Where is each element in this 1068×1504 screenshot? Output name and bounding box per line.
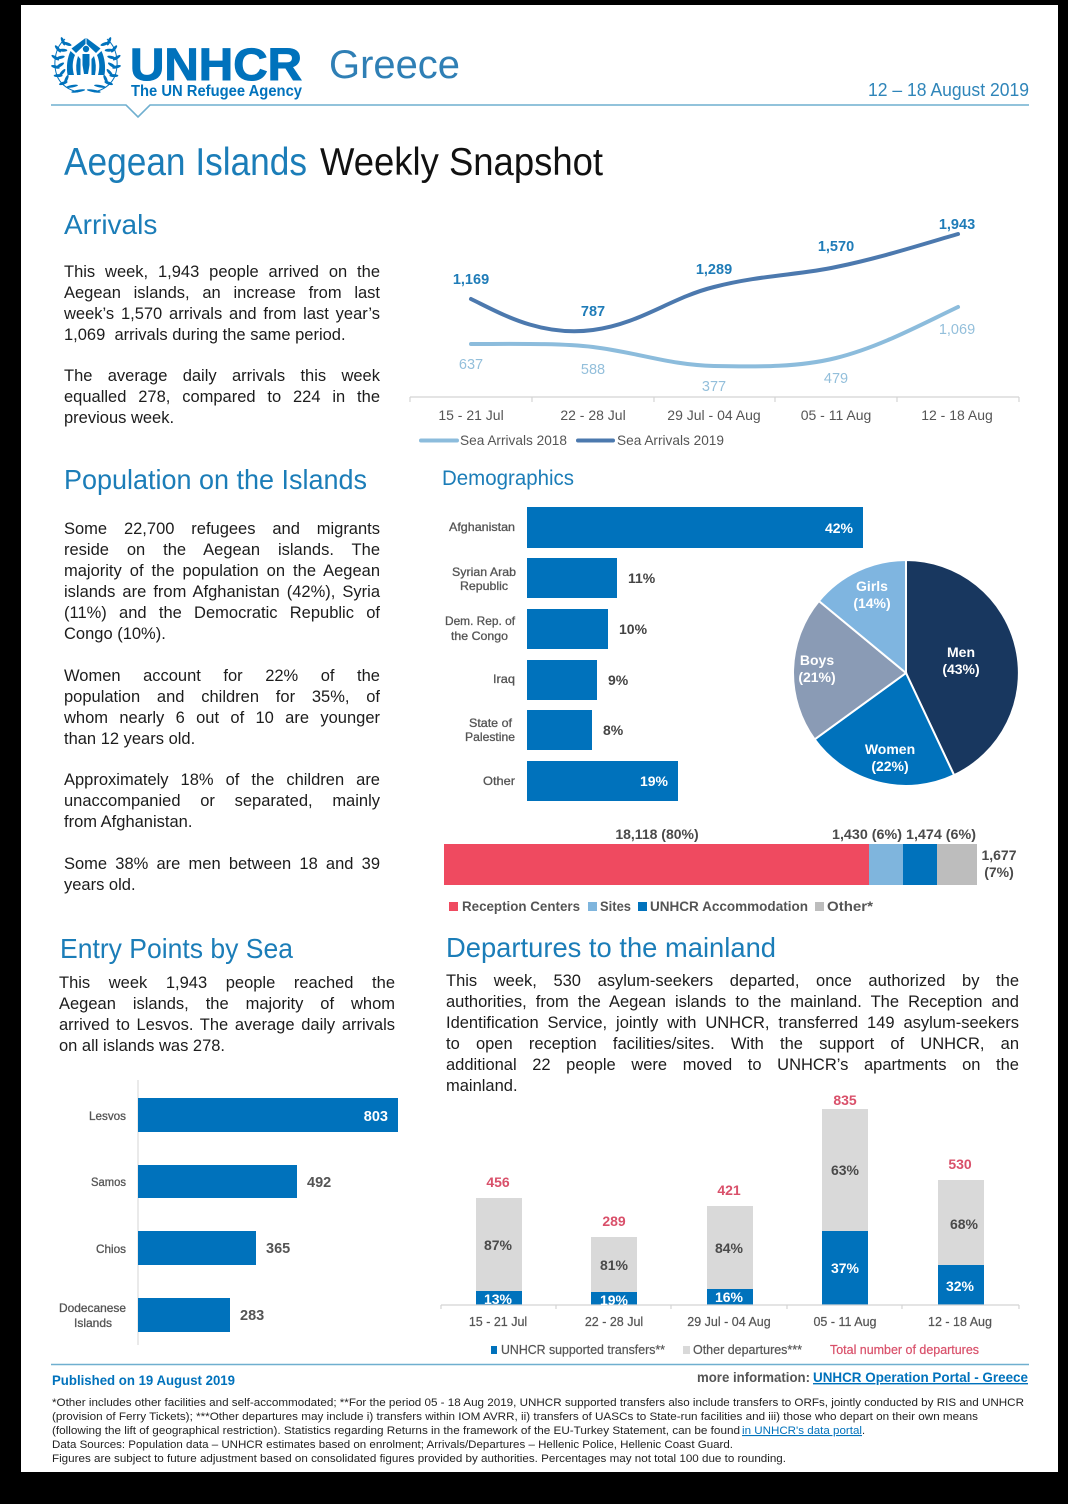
footnotes: *Other includes other facilities and self-accommodated; **For the period 05 - 18 Aug 2019, UNHCR supported transfers also include transfers to ORFs, jointly conducted by RIS and UNHCR xyxy=(52,1397,1024,1409)
stacked bar: accommodation: 1,430 (6%) xyxy=(832,826,902,842)
bar chart: entry points: Chios xyxy=(96,1242,126,1256)
stacked column chart: departures: 81% xyxy=(600,1257,629,1273)
bar chart: nationalities: 42% xyxy=(825,520,854,536)
text: departures summary: This week, 530 asylum-seekers departed, once authorized by the xyxy=(446,972,1019,990)
bar chart: entry points: Dodecanese xyxy=(59,1301,126,1315)
title xyxy=(64,141,603,184)
footnotes xyxy=(52,1397,1024,1465)
pie chart: age and gender: Women xyxy=(865,741,915,757)
legend: accommodation xyxy=(449,899,874,914)
header: UNHCR logo: The UN Refugee Agency xyxy=(131,83,302,100)
text: population summary: majority of the population on the Aegean xyxy=(64,562,380,580)
footnotes: (provision of Ferry Tickets); ***Other departures may include i) transfers within IOM AVRR, ii) transfers of UASCs to State-run facilities and iii) those who depart on their own means xyxy=(52,1411,979,1423)
text: population summary: unaccompanied or separated, mainly xyxy=(64,792,380,810)
pie chart: age and gender: (14%) xyxy=(853,595,891,611)
line chart: sea arrivals: 1,943 xyxy=(939,217,975,233)
bar chart: nationalities: Palestine xyxy=(465,730,515,744)
bar chart: nationalities: Iraq xyxy=(493,672,515,686)
stacked column chart: departures xyxy=(441,1092,1019,1357)
bar chart: entry points: 492 xyxy=(307,1175,331,1191)
text: arrivals summary: This week, 1,943 people arrived on the xyxy=(64,263,380,281)
stacked column chart: departures: 16% xyxy=(715,1289,744,1305)
line chart: sea arrivals: 1,289 xyxy=(696,262,732,278)
text: population summary: than 12 years old. xyxy=(64,730,195,748)
text: departures summary: additional 22 people were moved to UNHCR’s apartments on the xyxy=(446,1056,1019,1074)
line chart: sea arrivals: 12 - 18 Aug xyxy=(921,407,993,423)
more information link xyxy=(697,1369,1028,1385)
stacked column chart: departures: 530 xyxy=(948,1156,972,1172)
bar chart: nationalities: Republic xyxy=(460,579,508,593)
text: departures summary: authorities, from the Aegean islands to the mainland. The Reception and xyxy=(446,993,1019,1011)
pie chart: age and gender: Girls xyxy=(856,578,888,594)
line chart: sea arrivals: 1,570 xyxy=(818,239,854,255)
text: population summary: Approximately 18% of the children are xyxy=(64,771,380,789)
stacked column chart: departures: 15 - 21 Jul xyxy=(469,1315,527,1329)
footnotes: . xyxy=(862,1425,865,1437)
line chart: sea arrivals: 479 xyxy=(824,371,848,387)
pie chart: age and gender: (22%) xyxy=(871,758,909,774)
stacked column chart: departures: 22 - 28 Jul xyxy=(585,1315,643,1329)
header: UNHCR logo xyxy=(51,37,302,100)
text: population summary: Some 22,700 refugees and migrants xyxy=(64,520,380,538)
bar chart: nationalities: State of xyxy=(469,716,513,730)
text: entry points summary: This week 1,943 people reached the xyxy=(59,974,395,992)
text: population summary: (11%) and the Democratic Republic of xyxy=(64,604,380,622)
stacked column chart: departures: 456 xyxy=(486,1174,510,1190)
pie chart: age and gender: (21%) xyxy=(798,669,836,685)
text: entry points summary: on all islands was 278. xyxy=(59,1037,225,1055)
header: date: 12 – 18 August 2019 xyxy=(868,80,1029,100)
stacked column chart: departures: 289 xyxy=(602,1213,626,1229)
stacked bar: accommodation: 1,474 (6%) xyxy=(906,826,976,842)
stacked bar: accommodation: 1,677 xyxy=(981,847,1017,863)
stacked column chart: departures: 12 - 18 Aug xyxy=(928,1315,992,1329)
bar chart: entry points: 803 xyxy=(364,1109,388,1125)
text: population summary: whom nearly 6 out of 10 are younger xyxy=(64,709,380,727)
bar chart: nationalities: 11% xyxy=(628,570,656,586)
footnotes: in UNHCR's data portal xyxy=(742,1425,862,1437)
bar chart: entry points: 283 xyxy=(240,1308,264,1324)
text: arrivals summary: Aegean islands, an increase from last xyxy=(64,284,380,302)
stacked column chart: departures: 05 - 11 Aug xyxy=(813,1315,877,1329)
legend: accommodation: Reception Centers xyxy=(462,899,580,914)
bar chart: nationalities: 19% xyxy=(640,773,669,789)
stacked column chart: departures: 84% xyxy=(715,1240,744,1256)
bar chart: entry points: Samos xyxy=(91,1175,126,1189)
text: arrivals summary: week’s 1,570 arrivals and from last year’s xyxy=(64,305,380,323)
legend: accommodation: Sites xyxy=(600,899,631,914)
bar chart: entry points: Islands xyxy=(74,1316,112,1330)
stacked column chart: departures: 32% xyxy=(946,1278,975,1294)
more information link: UNHCR Operation Portal - Greece xyxy=(813,1369,1028,1385)
legend: departures: UNHCR supported transfers** xyxy=(501,1343,665,1357)
stacked bar: accommodation: 18,118 (80%) xyxy=(615,826,699,842)
line chart: sea arrivals: Sea Arrivals 2019 xyxy=(617,432,724,448)
footnotes: Figures are subject to future adjustment based on consolidated figures provided by authorities. Percentages may not total 100 due to rounding. xyxy=(52,1453,786,1465)
heading: arrivals: Arrivals xyxy=(64,209,157,240)
title: Weekly Snapshot xyxy=(320,141,603,184)
heading: departures: Departures to the mainland xyxy=(446,932,776,963)
bar chart: nationalities: Other xyxy=(483,774,515,788)
bar chart: nationalities: 9% xyxy=(608,672,629,688)
stacked column chart: departures: 13% xyxy=(484,1291,513,1307)
text: arrivals summary xyxy=(64,263,380,427)
line chart: sea arrivals: 787 xyxy=(581,304,605,320)
legend: departures: Other departures*** xyxy=(693,1343,802,1357)
pie chart: age and gender: Boys xyxy=(800,652,834,668)
icon: UNHCR emblem xyxy=(51,37,121,93)
text: population summary: years old. xyxy=(64,876,136,894)
text: population summary: from Afghanistan. xyxy=(64,813,192,831)
line chart: sea arrivals: 05 - 11 Aug xyxy=(801,407,871,423)
text: population summary: Congo (10%). xyxy=(64,625,166,643)
bar chart: nationalities xyxy=(445,507,863,801)
line chart: sea arrivals: Sea Arrivals 2018 xyxy=(460,432,567,448)
line chart: sea arrivals: 15 - 21 Jul xyxy=(438,407,504,423)
stacked column chart: departures: 68% xyxy=(950,1216,979,1232)
header: UNHCR logo: UNHCR xyxy=(130,39,302,90)
text: departures summary: mainland. xyxy=(446,1077,518,1095)
legend: departures: Total number of departures xyxy=(830,1343,979,1357)
footnotes: Data Sources: Population data – UNHCR estimates based on enrolment; Arrivals/Departures – Hellenic Police, Hellenic Coast Guard. xyxy=(52,1439,733,1451)
text: departures summary xyxy=(446,972,1019,1095)
bar chart: entry points: Lesvos xyxy=(89,1109,126,1123)
legend: accommodation: Other* xyxy=(827,899,874,914)
line chart: sea arrivals: 637 xyxy=(459,357,483,373)
heading: demographics: Demographics xyxy=(442,466,574,490)
header: country name: Greece xyxy=(329,43,460,87)
title: Aegean Islands xyxy=(64,141,307,184)
text: population summary: Women account for 22% of the xyxy=(64,667,380,685)
line chart: sea arrivals: 1,169 xyxy=(453,272,489,288)
bar chart: nationalities: Dem. Rep. of xyxy=(445,614,516,628)
text: population summary: population and children for 35%, of xyxy=(64,688,380,706)
text: arrivals summary: The average daily arrivals this week xyxy=(64,367,380,385)
text: population summary xyxy=(64,520,380,894)
text: population summary: Some 38% are men between 18 and 39 xyxy=(64,855,380,873)
text: arrivals summary: previous week. xyxy=(64,409,174,427)
stacked column chart: departures: 37% xyxy=(831,1260,860,1276)
text: population summary: islands are from Afghanistan (42%), Syria xyxy=(64,583,380,601)
line chart: sea arrivals: 22 - 28 Jul xyxy=(560,407,626,423)
publication date: Published on 19 August 2019 xyxy=(52,1372,235,1388)
stacked column chart: departures: 19% xyxy=(600,1292,629,1308)
footer rule xyxy=(51,1364,1029,1366)
legend: departures xyxy=(491,1343,979,1357)
stacked column chart: departures: 421 xyxy=(717,1182,741,1198)
bar chart: nationalities: 10% xyxy=(619,621,648,637)
more information link: more information: xyxy=(697,1369,810,1385)
text: population summary: reside on the Aegean islands. The xyxy=(64,541,380,559)
bar chart: entry points: 365 xyxy=(266,1241,290,1257)
line chart: sea arrivals: 588 xyxy=(581,362,605,378)
bar chart: entry points xyxy=(59,1080,398,1345)
text: entry points summary: arrived to Lesvos. The average daily arrivals xyxy=(59,1016,395,1034)
pie chart: age and gender xyxy=(793,560,1019,786)
text: entry points summary: Aegean islands, the majority of whom xyxy=(59,995,395,1013)
heading: entry points: Entry Points by Sea xyxy=(60,933,294,964)
text: departures summary: Identification Service, jointly with UNHCR, transferred 149 asylum-seekers xyxy=(446,1014,1019,1032)
bar chart: nationalities: 8% xyxy=(603,722,624,738)
text: entry points summary xyxy=(59,974,395,1055)
pie chart: age and gender: Men xyxy=(947,644,975,660)
stacked column chart: departures: 835 xyxy=(833,1092,857,1108)
line chart: sea arrivals: 377 xyxy=(702,379,726,395)
stacked column chart: departures: 63% xyxy=(831,1162,860,1178)
text: arrivals summary: equalled 278, compared to 224 in the xyxy=(64,388,380,406)
text: arrivals summary: 1,069 arrivals during the same period. xyxy=(64,326,346,344)
bar chart: nationalities: Syrian Arab xyxy=(452,565,516,579)
text: departures summary: to open reception facilities/sites. With the support of UNHCR, an xyxy=(446,1035,1019,1053)
line chart: sea arrivals: 29 Jul - 04 Aug xyxy=(667,407,761,423)
heading: population: Population on the Islands xyxy=(64,464,367,495)
footnotes: (following the lift of geographical restriction). Statistics regarding Returns in the framework of the EU-Turkey Statement, can be found xyxy=(52,1425,740,1437)
stacked column chart: departures: 29 Jul - 04 Aug xyxy=(687,1315,771,1329)
stacked column chart: departures: 87% xyxy=(484,1237,513,1253)
bar chart: nationalities: the Congo xyxy=(451,629,508,643)
header rule with notch xyxy=(51,105,1029,117)
line chart: sea arrivals: 1,069 xyxy=(939,322,975,338)
stacked bar: accommodation xyxy=(444,826,1017,914)
bar chart: nationalities: Afghanistan xyxy=(449,520,515,534)
pie chart: age and gender: (43%) xyxy=(942,661,980,677)
line chart: sea arrivals xyxy=(410,217,1019,448)
legend: accommodation: UNHCR Accommodation xyxy=(650,899,808,914)
stacked bar: accommodation: (7%) xyxy=(984,864,1014,880)
